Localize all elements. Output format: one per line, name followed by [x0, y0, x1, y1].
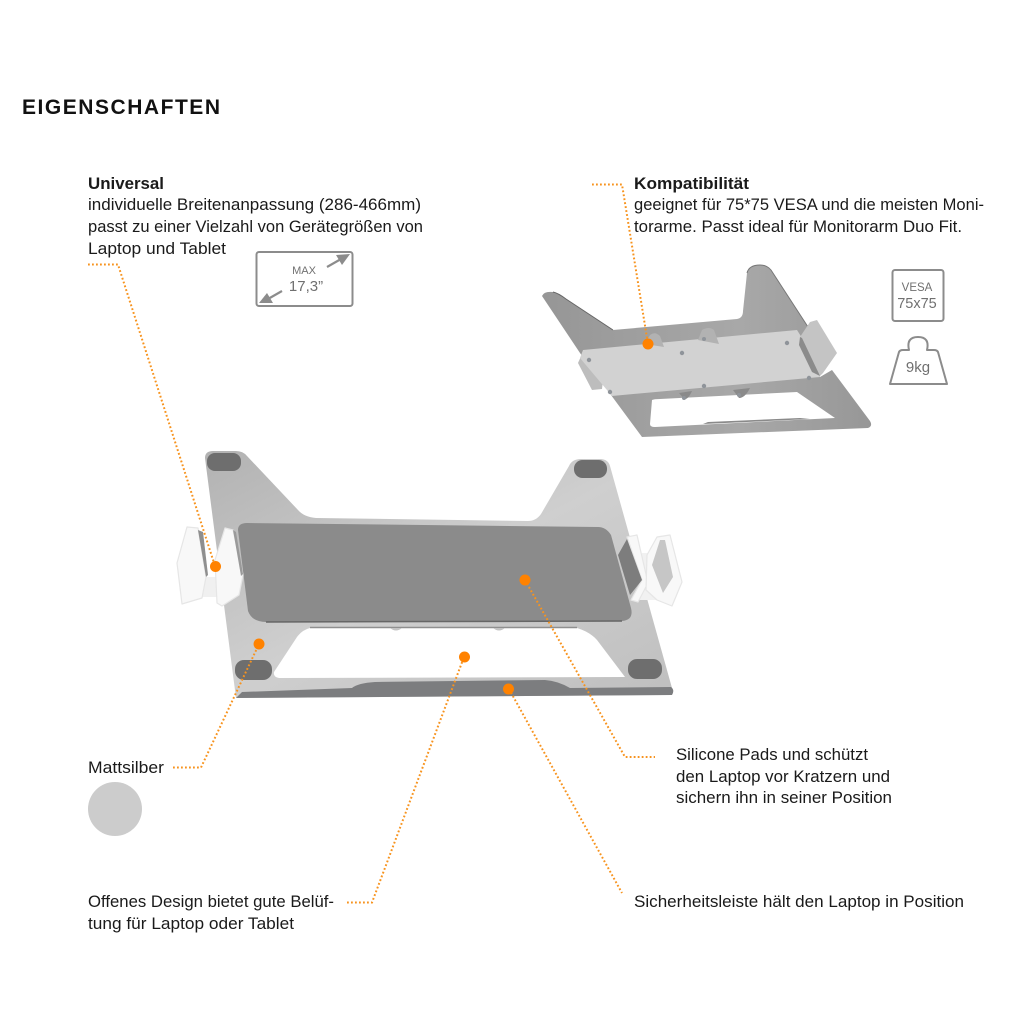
text block: Silicone Pads: Silicone Pads und schützt	[676, 746, 868, 764]
colour swatch	[88, 782, 142, 836]
icon: VESA 75x75: 75x75	[897, 296, 937, 312]
text block: Silicone Pads	[676, 746, 892, 807]
icon: max 17,3 inch	[256, 252, 352, 306]
right clamp	[800, 320, 837, 376]
title: EIGENSCHAFTEN	[22, 96, 220, 119]
text block: Kompatibilität: geeignet für 75*75 VESA und die meisten Moni-	[634, 196, 984, 214]
icon: VESA 75x75	[892, 270, 944, 321]
opening edge	[310, 626, 577, 628]
large stand, front view	[177, 451, 682, 698]
rivets	[390, 628, 505, 630]
text block: Universal: passt zu einer Vielzahl von Gerätegrößen von	[88, 218, 423, 236]
text block: Mattsilber: Mattsilber	[88, 759, 165, 777]
small stand, rear view	[542, 265, 871, 437]
mounting plate	[580, 330, 820, 396]
text block: Silicone Pads: den Laptop vor Kratzern und	[676, 768, 890, 786]
rear plate	[542, 265, 871, 437]
text block: Silicone Pads: sichern ihn in seiner Position	[676, 789, 892, 807]
rubber pads	[207, 453, 662, 680]
right clamp	[640, 553, 662, 600]
text block: Universal: individuelle Breitenanpassung (286-466mm)	[88, 196, 421, 214]
mounting bumps	[645, 333, 664, 347]
text block: Offenes Design: Offenes Design bietet gute Belüf-	[88, 893, 334, 911]
text block: Kompatibilität: torarme. Passt ideal für Monitorarm Duo Fit.	[634, 218, 962, 236]
text block: Universal: Laptop und Tablet	[88, 240, 226, 258]
bottom safety strip	[236, 680, 673, 698]
text block: Kompatibilität: Kompatibilität	[634, 175, 750, 193]
callout lines	[88, 184, 655, 902]
icon: weight 9kg: 9kg	[906, 359, 930, 376]
text block: Kompatibilität	[634, 175, 984, 236]
text block: Sicherheitsleiste: Sicherheitsleiste hält den Laptop in Position	[634, 893, 964, 911]
icon: VESA 75x75: VESA	[902, 282, 933, 294]
callout markers	[210, 338, 654, 694]
icon: weight 9kg	[890, 337, 947, 384]
base plate	[205, 451, 672, 698]
text block: Offenes Design	[88, 893, 334, 933]
icon: max 17,3 inch: 17,3”	[289, 278, 323, 295]
icon: max 17,3 inch: MAX	[292, 265, 317, 277]
text block: Universal: Universal	[88, 175, 164, 193]
text block: Offenes Design: tung für Laptop oder Tablet	[88, 915, 294, 933]
screws	[587, 337, 811, 400]
text block: Universal	[88, 175, 423, 258]
left clamp	[578, 354, 604, 390]
silicone pad	[238, 523, 632, 622]
left clamp	[200, 577, 222, 597]
